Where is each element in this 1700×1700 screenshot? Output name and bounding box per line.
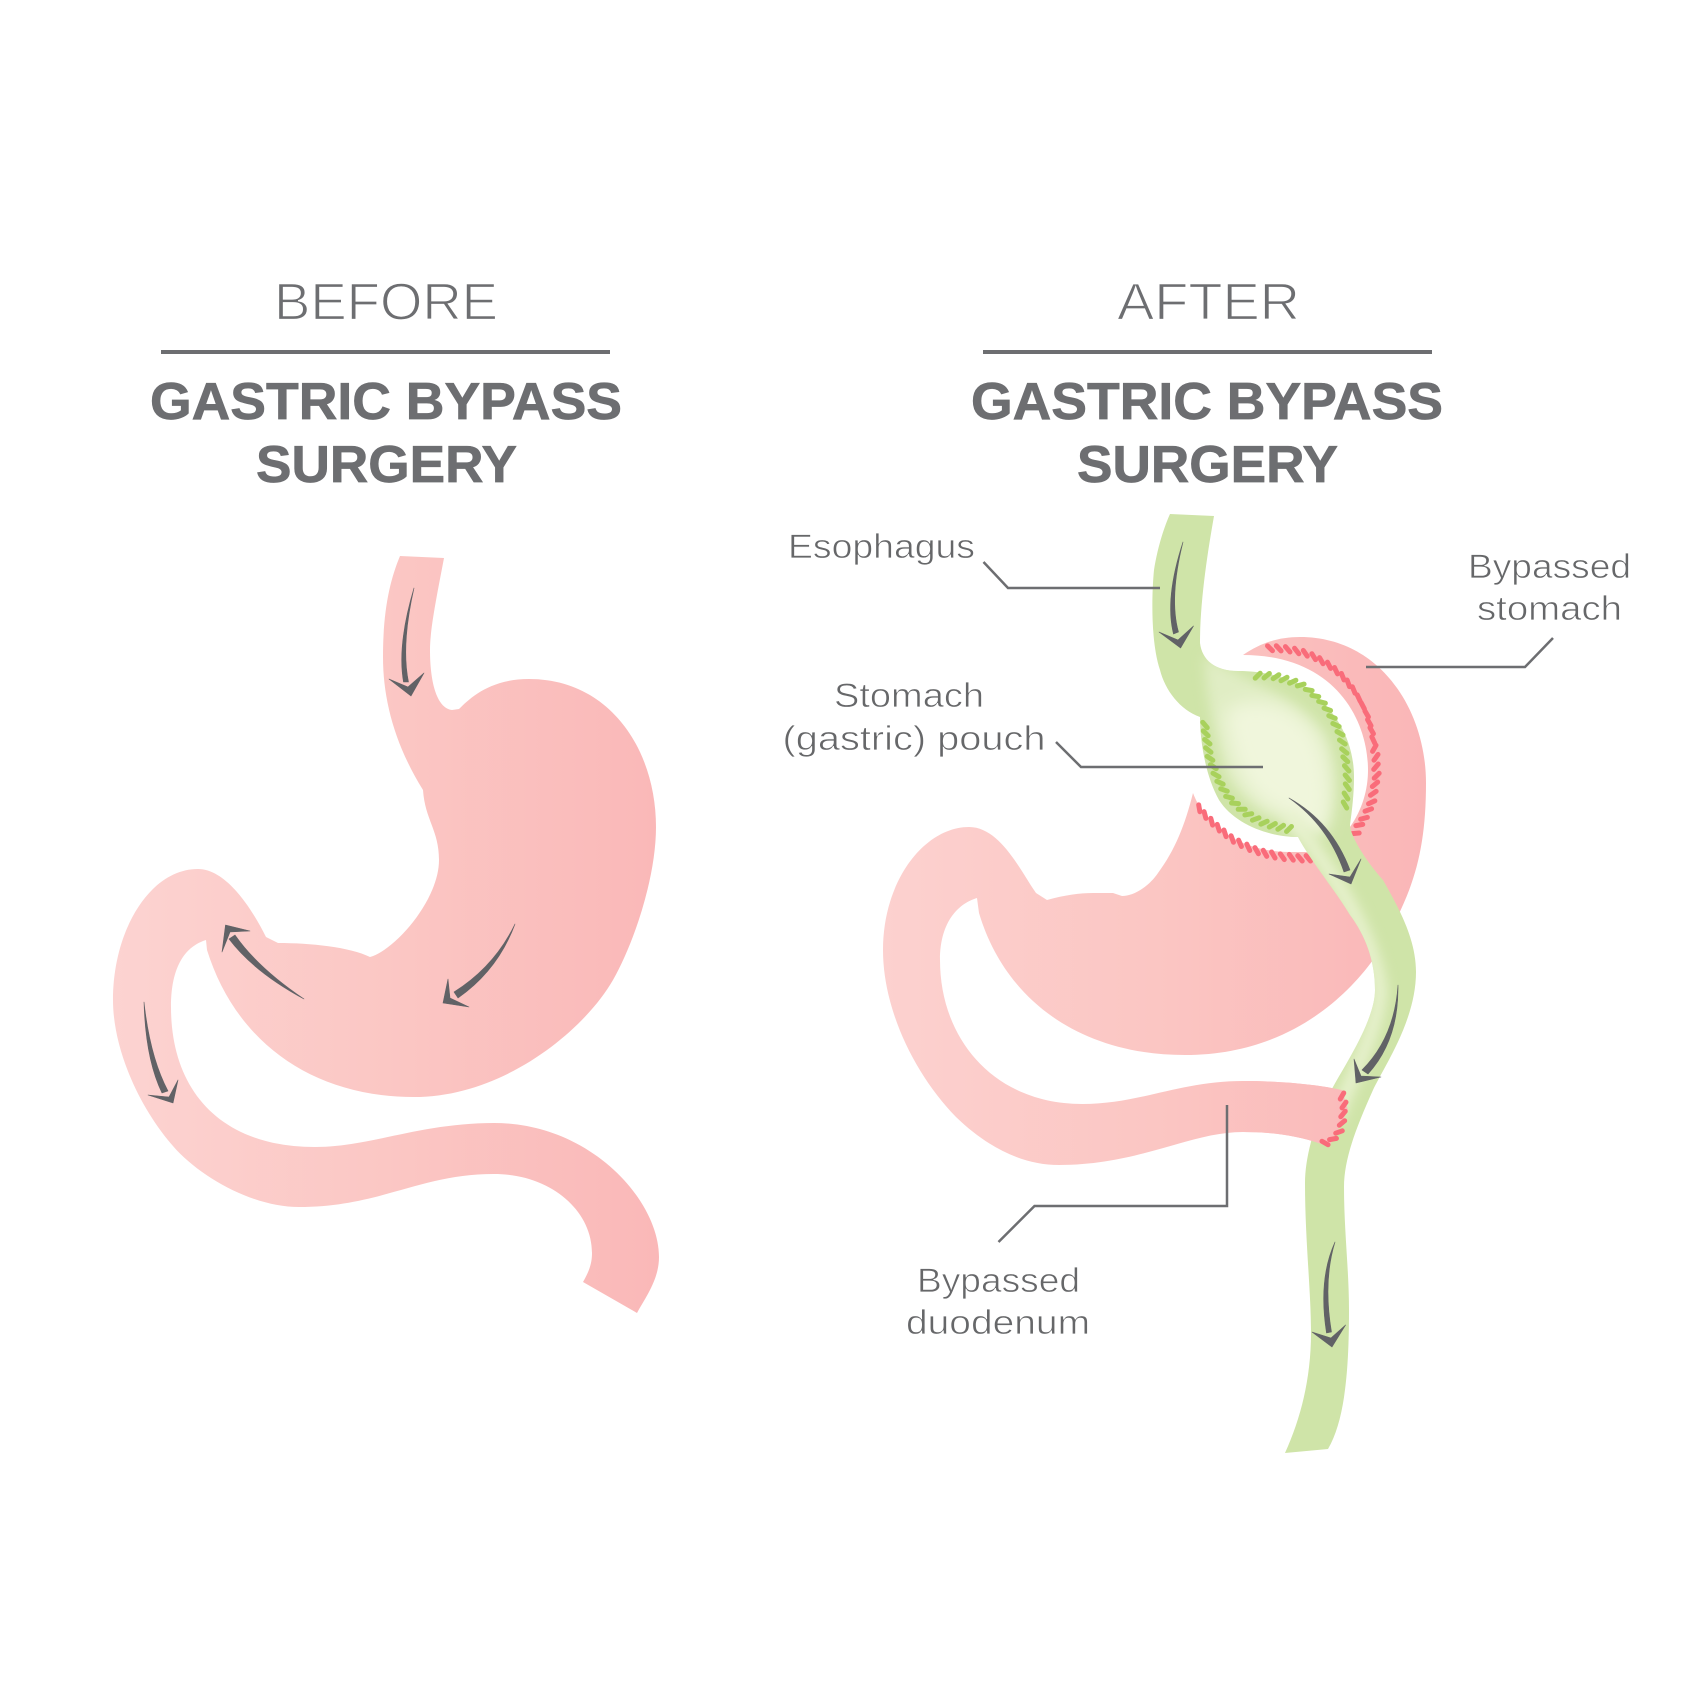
stitches: gastric pouch lower	[1199, 719, 1295, 835]
stitches: duodenum end	[1319, 1090, 1349, 1148]
leader line: stomach pouch	[1056, 742, 1263, 767]
arrow: esophagus flow	[389, 588, 424, 696]
title: gastric bypass surgery, after: SURGERY	[1077, 436, 1338, 494]
stitches: bypassed stomach lower	[1196, 802, 1314, 865]
illustration: gastric pouch and rerouted intestine	[1152, 514, 1416, 1453]
panel: after	[782, 274, 1631, 1453]
arrow: lower intestine flow	[1312, 1242, 1346, 1347]
label: stomach pouch: (gastric) pouch	[782, 720, 1046, 758]
panel: before	[113, 274, 659, 1313]
heading: after: AFTER	[1117, 274, 1300, 332]
stitches: gastric pouch upper	[1252, 670, 1353, 811]
label: stomach pouch	[782, 677, 1046, 758]
title: gastric bypass surgery, after: GASTRIC BYPASS	[971, 373, 1443, 431]
duodenum end over intestine	[1243, 1081, 1348, 1147]
arrow: stomach flow	[443, 924, 515, 1007]
leader line: bypassed stomach	[1366, 638, 1553, 667]
heading: before: BEFORE	[274, 274, 498, 332]
label: bypassed stomach: stomach	[1477, 590, 1622, 628]
title: gastric bypass surgery, before: GASTRIC BYPASS	[150, 373, 622, 431]
arrow: out of pouch	[1289, 798, 1361, 884]
arrow: limb flow	[1354, 985, 1398, 1083]
title: gastric bypass surgery, before: SURGERY	[256, 436, 517, 494]
title: gastric bypass surgery, before	[150, 373, 622, 494]
illustration: bypassed stomach and duodenum	[883, 637, 1426, 1165]
highlight: pouch and limb shading	[1205, 655, 1380, 1120]
stitches: bypassed stomach upper	[1264, 642, 1383, 836]
arrow: esophagus flow	[1159, 542, 1194, 648]
label: bypassed duodenum	[906, 1262, 1090, 1342]
title divider: after	[983, 350, 1432, 354]
title: gastric bypass surgery, after	[971, 373, 1443, 494]
arrow: duodenum flow	[144, 1002, 178, 1103]
label: stomach pouch: Stomach	[834, 677, 984, 715]
label: bypassed stomach	[1468, 548, 1631, 628]
label: bypassed duodenum: Bypassed	[917, 1262, 1080, 1300]
illustration: normal stomach and intestine	[113, 556, 659, 1313]
label: bypassed duodenum: duodenum	[906, 1304, 1090, 1342]
title divider: before	[161, 350, 610, 354]
leader line: esophagus	[984, 562, 1160, 588]
label: esophagus: Esophagus	[788, 528, 975, 566]
arrow: toward duodenum	[222, 925, 304, 999]
leader line: bypassed duodenum	[998, 1105, 1227, 1242]
label: bypassed stomach: Bypassed	[1468, 548, 1631, 586]
